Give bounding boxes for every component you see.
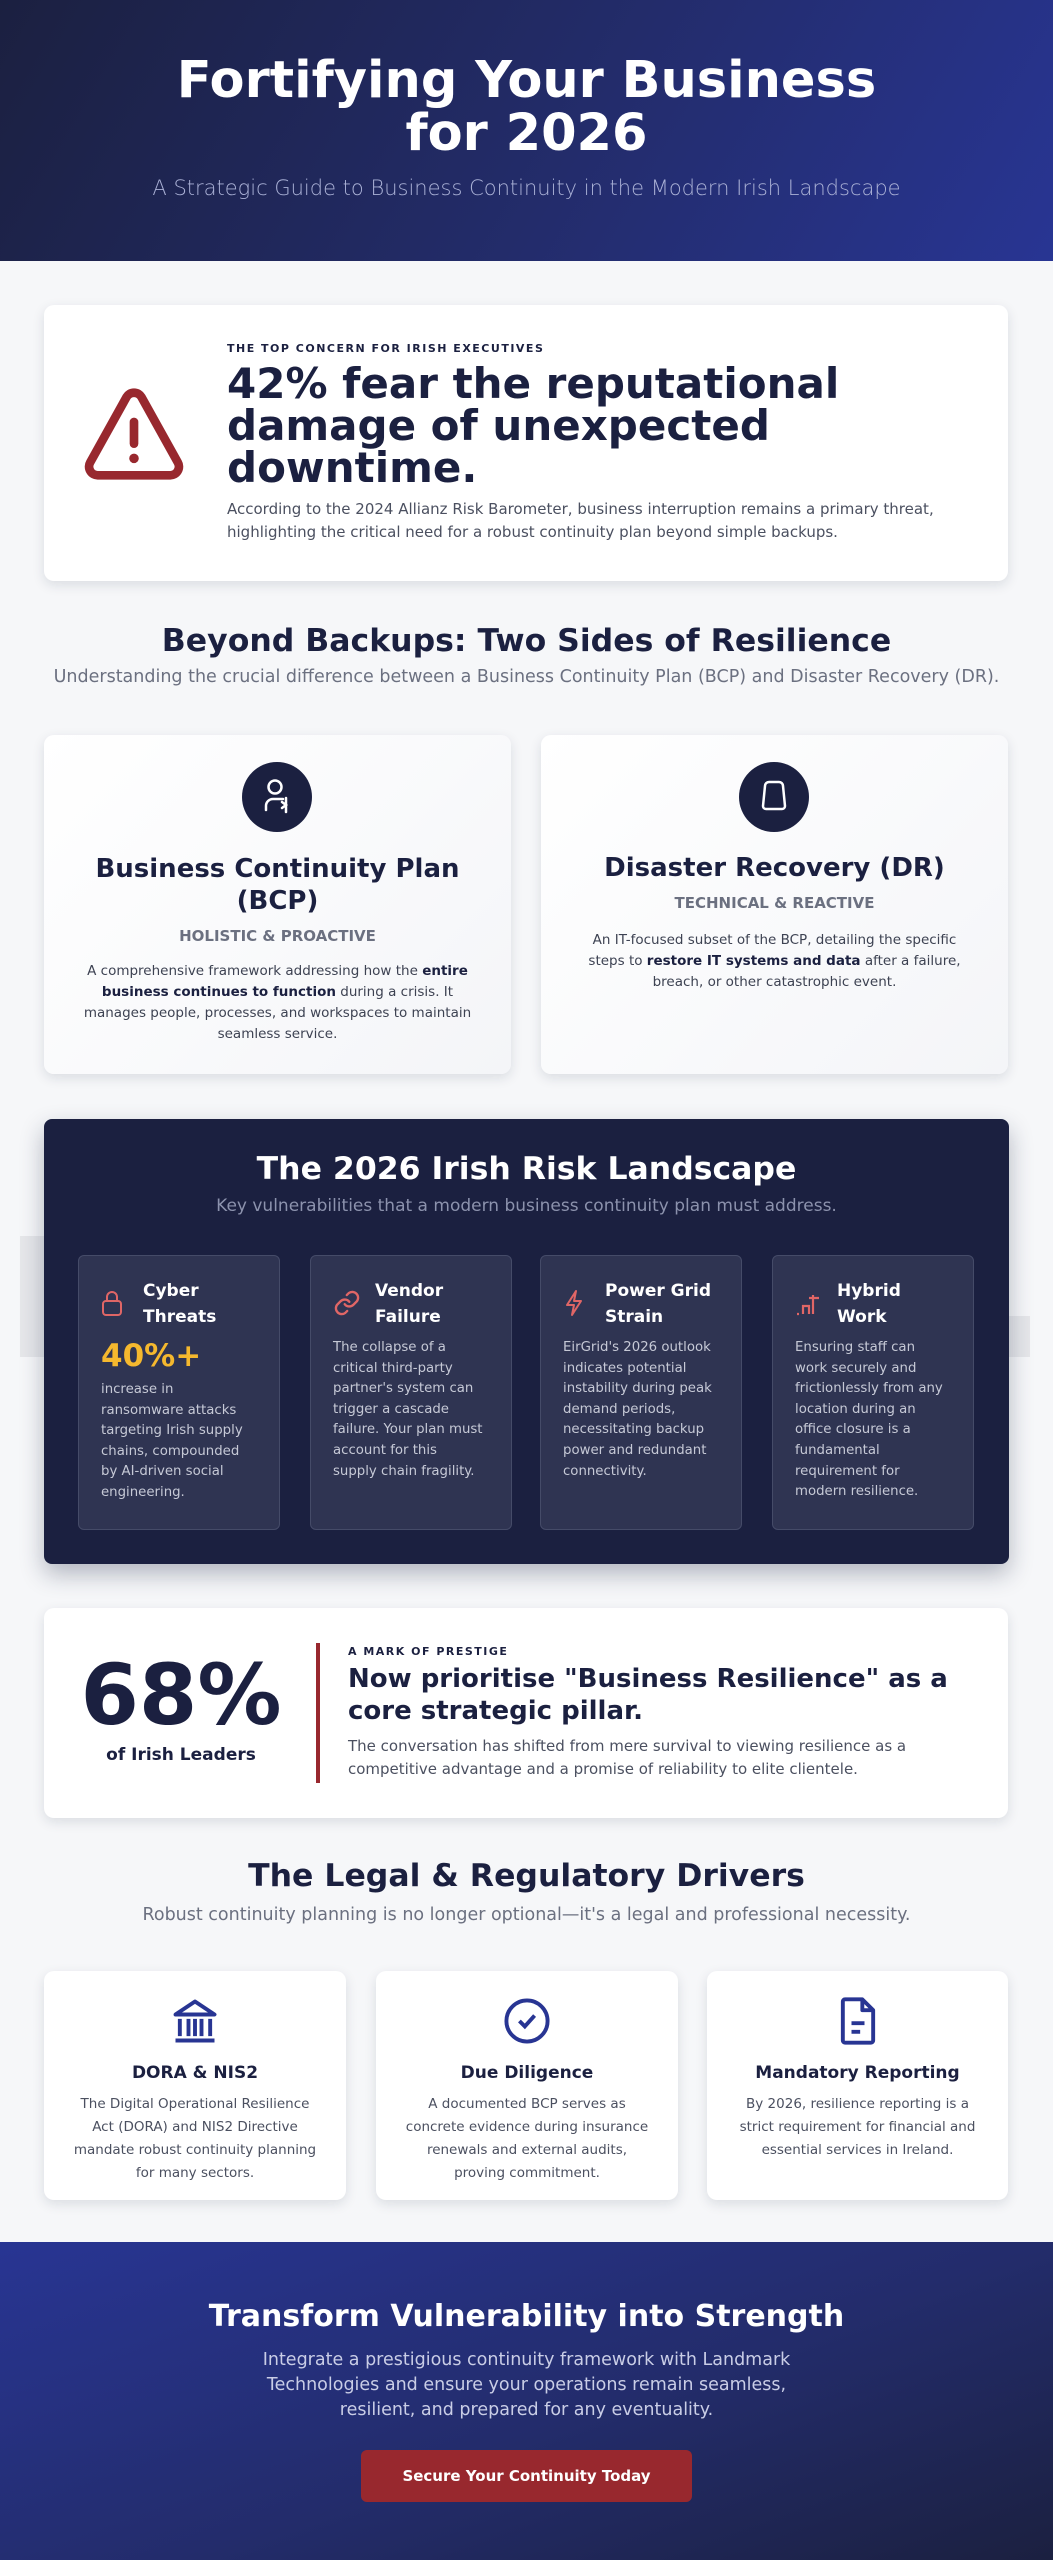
title: Fortifying Your Business — [177, 51, 876, 110]
description: A comprehensive framework addressing how the entire business continues to function during a crisis. It manages people, processes, and workspaces to maintain seamless service. — [84, 963, 471, 1042]
big statement: 42% fear the reputational — [227, 359, 839, 408]
big statement: damage of unexpected — [227, 401, 770, 450]
risk card: vendor: account for this — [333, 1443, 437, 1458]
header banner — [0, 0, 1053, 261]
card: due diligence — [376, 1971, 678, 2200]
footer heading: Transform Vulnerability into Strength — [209, 2299, 844, 2334]
risk card: vendor: Failure — [375, 1307, 441, 1327]
card: due diligence: A documented BCP serves as concrete evidence during insurance renewals and external audits, proving commitment. — [406, 2096, 648, 2181]
card: reporting: By 2026, resilience reporting is a strict requirement for financial and essential services in Ireland. — [740, 2096, 975, 2158]
risk card: power: instability during peak — [563, 1381, 712, 1396]
risk card: hybrid: Hybrid — [837, 1281, 901, 1301]
icon: check circle — [504, 1998, 550, 2044]
heading: Now prioritise "Business Resilience" as a core strategic pillar. — [348, 1664, 948, 1726]
risk card: hybrid: frictionlessly from any — [795, 1381, 943, 1396]
subtitle: Key vulnerabilities that a modern business continuity plan must address. — [216, 1196, 837, 1216]
eyebrow: THE TOP CONCERN FOR IRISH EXECUTIVES — [227, 342, 544, 355]
icon: bolt — [566, 1290, 582, 1316]
risk card: power — [540, 1255, 742, 1530]
risk card: cyber: by AI-driven social — [101, 1464, 224, 1479]
risk card: power: Strain — [605, 1307, 663, 1327]
title — [95, 854, 460, 916]
panel: risk landscape — [44, 1119, 1009, 1564]
risk card: vendor: critical third-party — [333, 1361, 453, 1376]
panel: BCP — [44, 735, 511, 1074]
risk card: power: indicates potential — [563, 1361, 686, 1376]
section heading: legal: The Legal & Regulatory Drivers — [248, 1858, 805, 1894]
eyebrow: A MARK OF PRESTIGE — [348, 1645, 508, 1658]
risk card: power: connectivity. — [563, 1464, 647, 1479]
icon: lock — [102, 1291, 122, 1316]
icon: document — [840, 1997, 876, 2045]
risk card: cyber: Cyber — [143, 1281, 199, 1301]
icon: bank — [174, 2000, 216, 2042]
card: DORA — [44, 1971, 346, 2200]
risk card: cyber: increase in — [101, 1382, 173, 1397]
footer CTA — [0, 2242, 1053, 2560]
stat card: 68% — [44, 1608, 1008, 1818]
risk card: power: necessitating backup — [563, 1422, 704, 1437]
risk card: hybrid — [772, 1255, 974, 1530]
heading: The 2026 Irish Risk Landscape — [257, 1151, 796, 1187]
text: The conversation has shifted from mere survival to viewing resilience as a competitive advantage and a promise of reliability to elite clientele. — [348, 1737, 906, 1778]
risk card: cyber: chains, compounded — [101, 1444, 239, 1459]
risk card: power: demand periods, — [563, 1402, 675, 1417]
title — [177, 51, 876, 163]
stat: 40%+ — [101, 1338, 201, 1374]
tag: HOLISTIC & PROACTIVE — [179, 927, 376, 945]
title: for 2026 — [405, 104, 648, 163]
card: due diligence: Due Diligence — [461, 2063, 593, 2083]
risk card: power: Power Grid — [605, 1281, 711, 1301]
risk card: hybrid: modern resilience. — [795, 1484, 918, 1499]
footer text: Integrate a prestigious continuity framework with Landmark Technologies and ensure your operations remain seamless, resilient, and prepared for any eventuality. — [263, 2350, 790, 2420]
section subtitle: Robust continuity planning is no longer optional—it's a legal and professional necessity. — [142, 1905, 910, 1925]
number caption: of Irish Leaders — [106, 1745, 256, 1765]
title: (BCP) — [237, 886, 318, 916]
title: Disaster Recovery (DR) — [604, 853, 945, 883]
section heading: two sides: Beyond Backups: Two Sides of Resilience — [162, 623, 891, 659]
risk card: hybrid: location during an — [795, 1402, 916, 1417]
risk card: vendor — [310, 1255, 512, 1530]
card: reporting — [707, 1971, 1008, 2200]
icon: person — [242, 762, 312, 832]
risk card: vendor: trigger a cascade — [333, 1402, 449, 1417]
big statement — [227, 359, 839, 492]
risk card: hybrid: Work — [837, 1307, 887, 1327]
card: DORA: The Digital Operational Resilience Act (DORA) and NIS2 Directive mandate robust continuity planning for many sectors. — [74, 2096, 316, 2181]
risk card: hybrid: requirement for — [795, 1464, 900, 1479]
risk card: vendor: partner's system can — [333, 1381, 473, 1396]
title: Business Continuity Plan — [95, 854, 460, 884]
description: An IT-focused subset of the BCP, detailing the specific steps to restore IT systems and data after a failure, breach, or other catastrophic event. — [588, 932, 961, 990]
risk card: cyber: engineering. — [101, 1485, 185, 1500]
big statement: downtime. — [227, 443, 477, 492]
risk card: cyber: ransomware attacks — [101, 1403, 236, 1418]
risk card: cyber — [78, 1255, 280, 1530]
panel: DR — [541, 735, 1008, 1074]
risk card: vendor: supply chain fragility. — [333, 1464, 474, 1479]
icon: warning triangle — [84, 388, 184, 480]
button — [361, 2450, 692, 2502]
risk card: hybrid: work securely and — [795, 1361, 916, 1376]
button: Secure Your Continuity Today — [402, 2467, 651, 2485]
section subtitle: Understanding the crucial difference between a Business Continuity Plan (BCP) and Disaster Recovery (DR). — [54, 667, 999, 687]
card: reporting: Mandatory Reporting — [755, 2063, 960, 2083]
icon: signal — [797, 1295, 819, 1316]
risk card: power: power and redundant — [563, 1443, 706, 1458]
card: DORA: DORA & NIS2 — [132, 2063, 258, 2083]
subtitle: A Strategic Guide to Business Continuity in the Modern Irish Landscape — [152, 176, 901, 200]
risk card: vendor: failure. Your plan must — [333, 1422, 483, 1437]
risk card: power: EirGrid's 2026 outlook — [563, 1340, 711, 1355]
risk card: cyber: targeting Irish supply — [101, 1423, 243, 1438]
tag: TECHNICAL & REACTIVE — [675, 894, 874, 912]
big number: 68% — [80, 1646, 282, 1744]
risk card: hybrid: Ensuring staff can — [795, 1340, 915, 1355]
top concern card — [44, 305, 1008, 581]
risk card: hybrid: office closure is a — [795, 1422, 911, 1437]
risk card: cyber: Threats — [143, 1307, 216, 1327]
risk card: hybrid: fundamental — [795, 1443, 880, 1458]
risk card: vendor: The collapse of a — [333, 1340, 446, 1355]
risk card: vendor: Vendor — [375, 1281, 443, 1301]
icon: recovery — [739, 762, 809, 832]
icon: link — [334, 1290, 360, 1316]
supporting text: According to the 2024 Allianz Risk Barometer, business interruption remains a primary threat, highlighting the critical need for a robust continuity plan beyond simple backups. — [227, 500, 934, 541]
